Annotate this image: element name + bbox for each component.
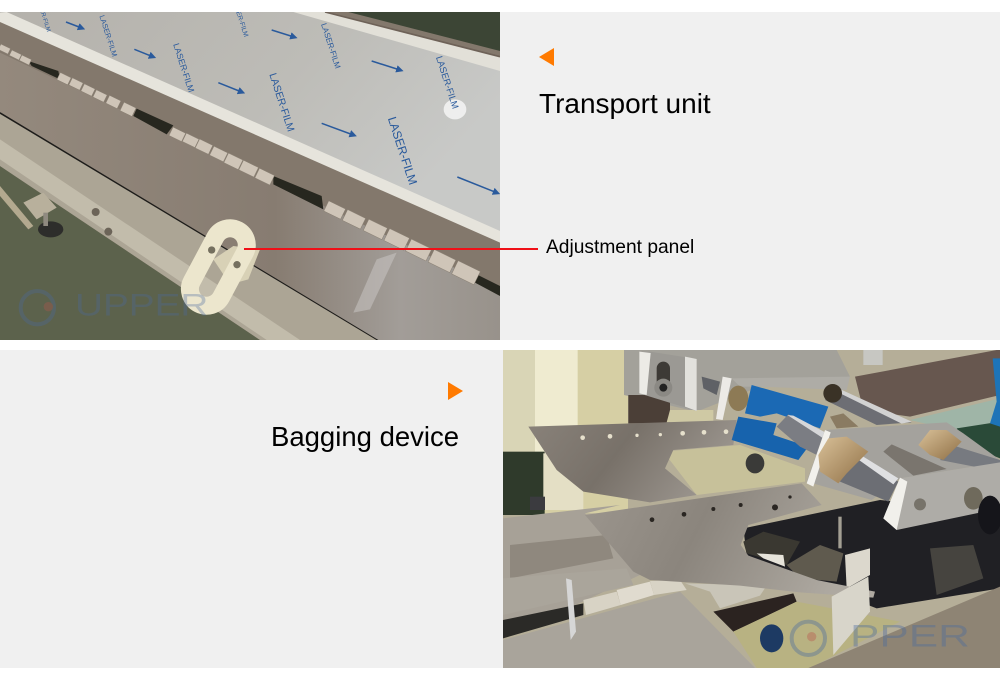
callout line: adjustment panel (244, 248, 538, 250)
white film edges (0, 12, 500, 243)
rear guide rods (702, 377, 912, 428)
threaded rod (883, 444, 947, 476)
chain gaps and pusher fingers (28, 61, 500, 296)
opening behind upper blade (663, 445, 805, 495)
chain blocks (0, 44, 480, 285)
panel: transport unit text background (500, 12, 1000, 340)
rod ends (807, 430, 1000, 502)
film brand labels: LASER-FILM (385, 115, 420, 187)
leveling foot and bracket (0, 186, 112, 237)
blue arrows (66, 22, 497, 193)
upper blade (528, 420, 737, 502)
front silver plate (883, 462, 1000, 534)
lower blade (585, 483, 875, 598)
cream wall and cabinet (503, 350, 628, 515)
film brand labels: LASER-FILM (434, 55, 460, 110)
small rod clip (566, 578, 576, 640)
film brand labels: LASER-FILM (319, 22, 342, 70)
icon: orange right triangle (448, 382, 463, 400)
aluminium side rail (0, 113, 378, 340)
laser film cover (0, 12, 500, 234)
lower gap floor (713, 577, 900, 668)
heading: Bagging device: Bagging device (271, 421, 459, 452)
right base plate (808, 587, 1000, 668)
watermark: UPPER (75, 286, 208, 322)
photo: transport unit conveyor (0, 12, 500, 340)
central carriage plate (807, 422, 1000, 500)
callout label: Adjustment panel: Adjustment panel (546, 237, 694, 258)
film brand labels: LASER-FILM (171, 42, 196, 94)
film brand labels: LASER-FILM (97, 14, 119, 58)
blue clamp (732, 385, 828, 460)
upper blade holes (580, 429, 728, 440)
watermark (21, 286, 208, 324)
dark machinery behind lower blade (743, 500, 1000, 608)
watermark (792, 618, 970, 655)
light reflection (353, 253, 397, 313)
rear silver bracket (624, 350, 850, 423)
floor (0, 166, 260, 340)
front table plate (503, 592, 755, 668)
lower steel bed (503, 505, 640, 638)
icon: orange left triangle (539, 48, 554, 66)
panel: bagging device text background (0, 350, 503, 668)
top right brown block (855, 350, 1000, 458)
white adjustment handle (184, 222, 260, 312)
watermark: PPER (850, 618, 970, 654)
stainless steel panel (0, 53, 500, 340)
main guide rod (777, 414, 837, 457)
photo: bagging device (503, 350, 1000, 668)
heading: Transport unit: Transport unit (539, 88, 711, 119)
bronze bushings (818, 430, 962, 483)
white chain blocks (583, 580, 767, 615)
film brand labels: LASER-FILM (266, 72, 296, 133)
lower blade holes (650, 495, 792, 522)
film brand labels (34, 0, 460, 187)
